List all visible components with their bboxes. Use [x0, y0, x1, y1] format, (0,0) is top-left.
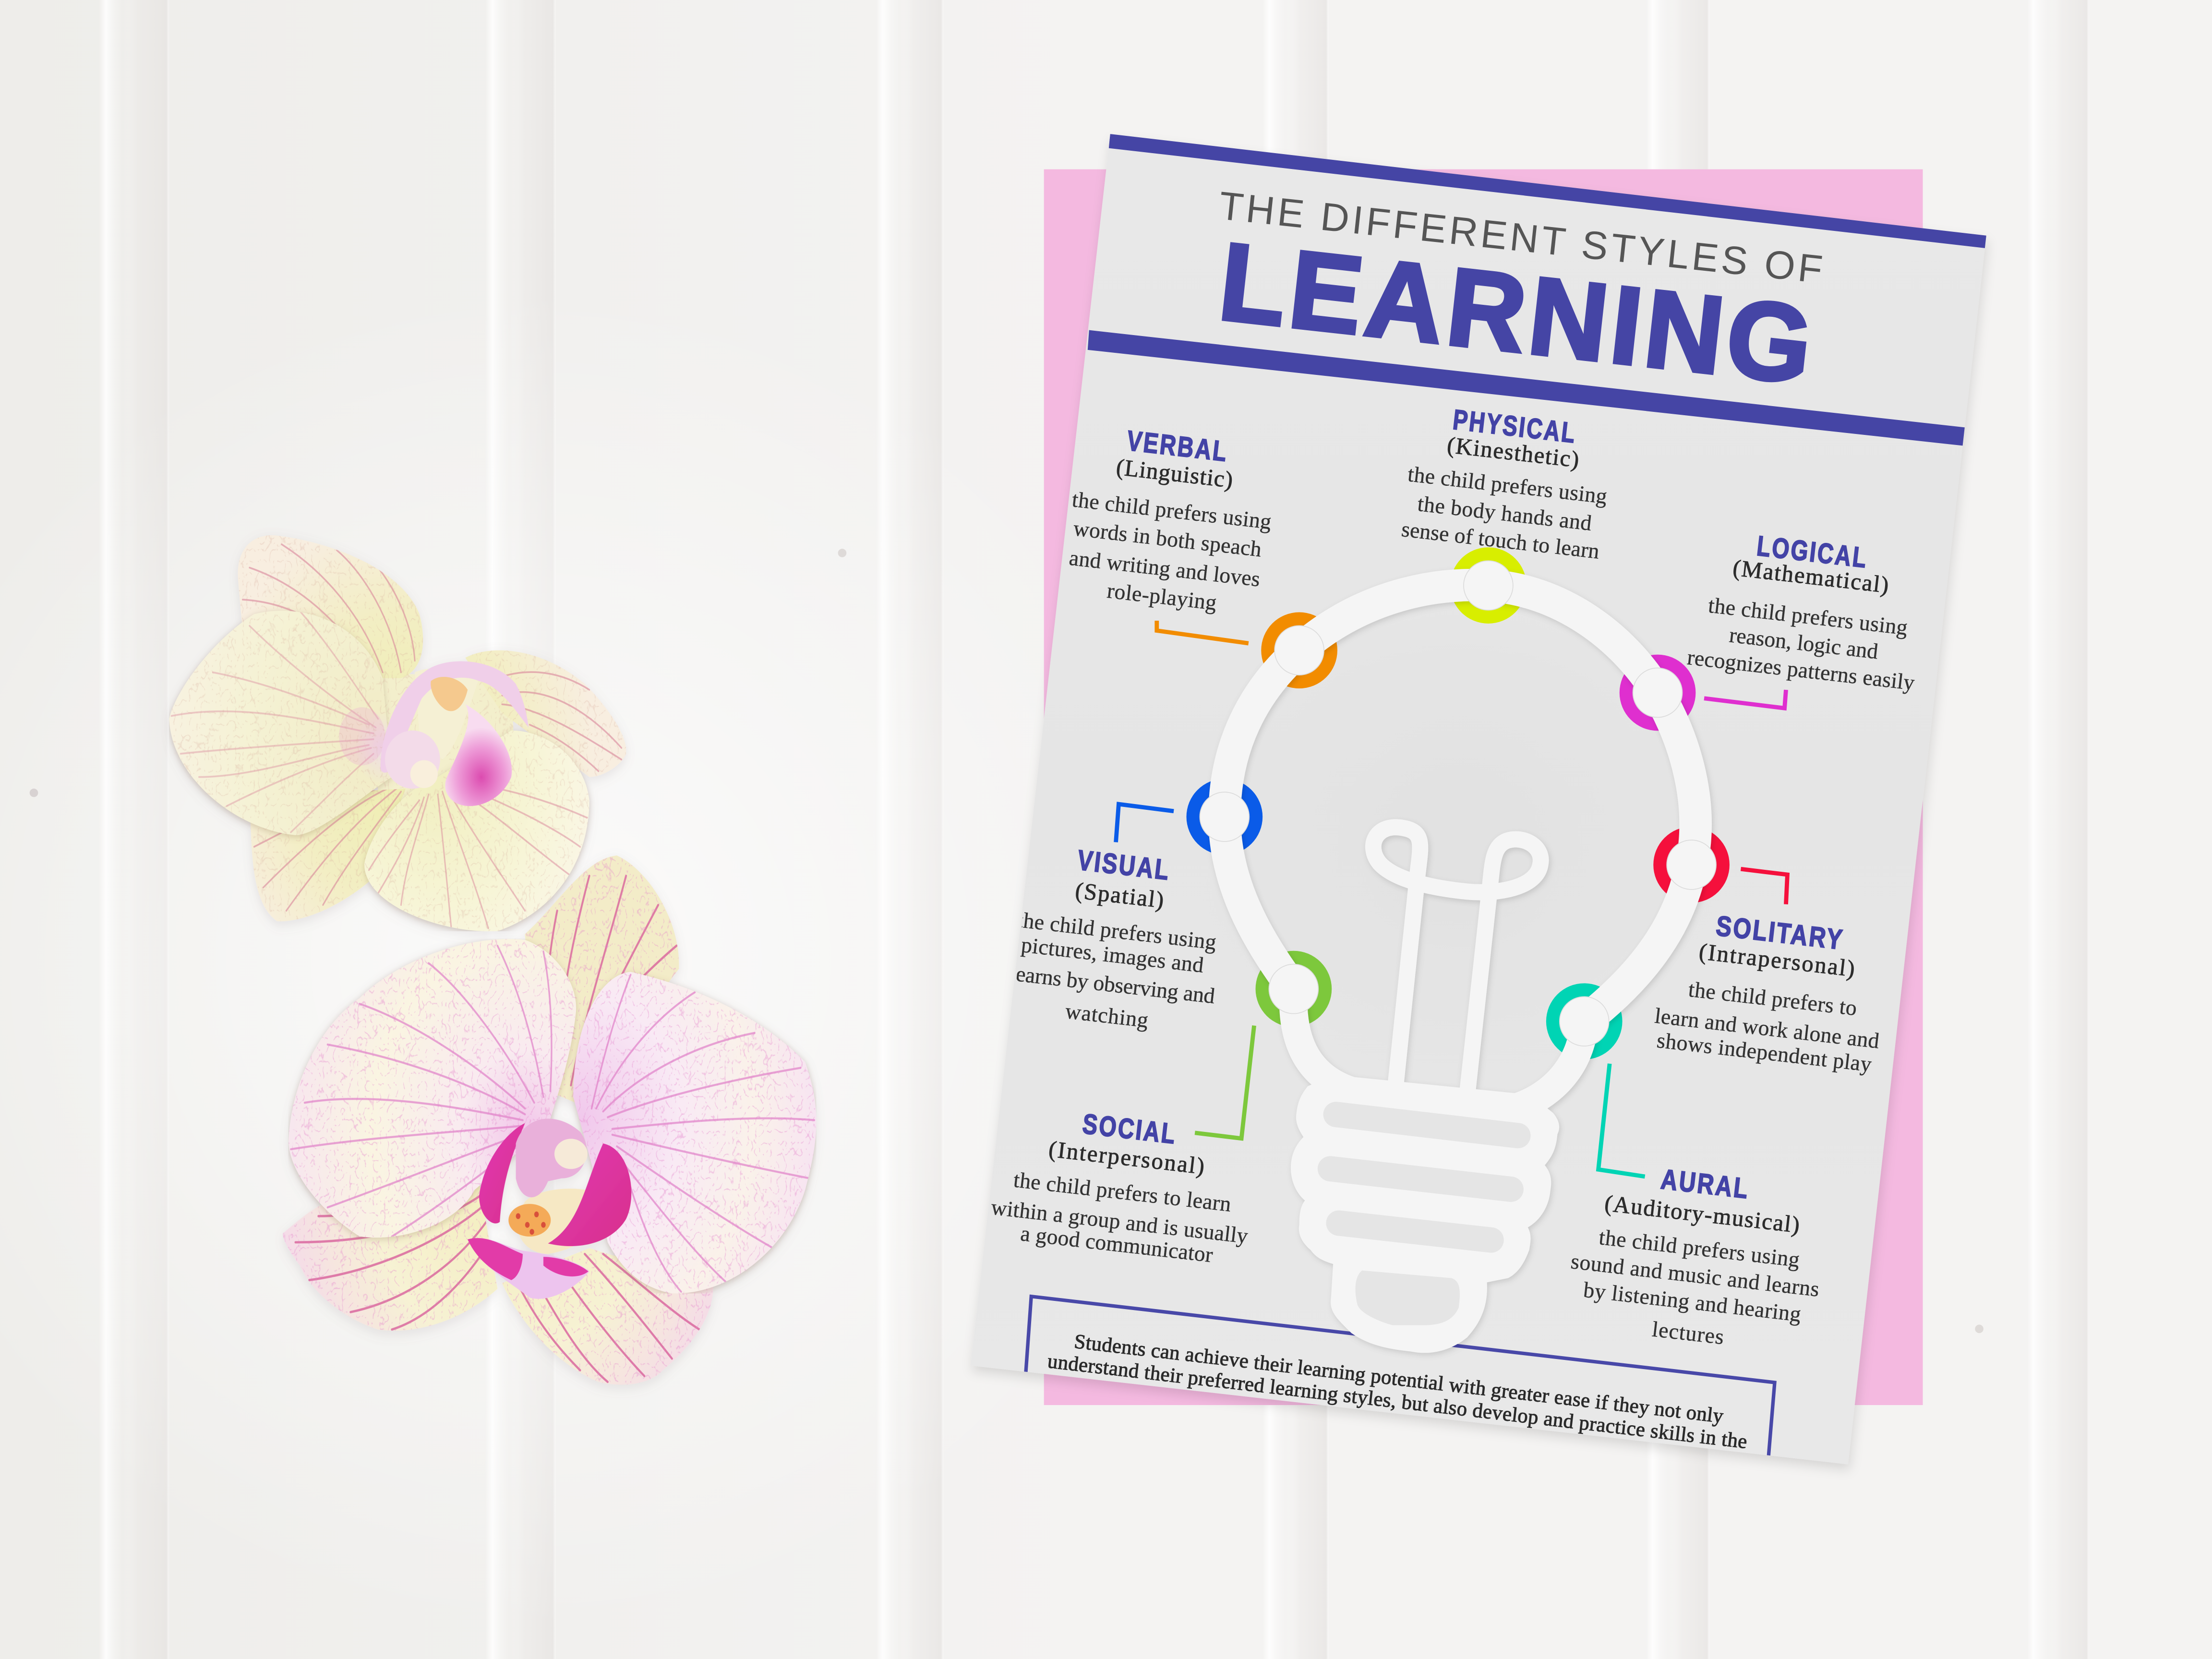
base slot 1	[1336, 1115, 1518, 1136]
bottom callout box outline	[1025, 1297, 1775, 1467]
text block: verbal: and writing and loves	[1068, 545, 1262, 591]
text block: physical: PHYSICAL	[1451, 404, 1578, 449]
text block: aural: sound and music and learns	[1570, 1249, 1821, 1301]
text block: aural: by listening and hearing	[1582, 1277, 1803, 1326]
top header band	[1109, 132, 1988, 248]
text block: solitary: (Intrapersonal)	[1698, 939, 1856, 982]
bottom callout text: Students can achieve their learning potential with greater ease if they not only	[1073, 1330, 1725, 1428]
text block: aural	[1570, 1164, 1821, 1349]
text block: verbal: words in both speach	[1072, 516, 1263, 562]
text block: solitary: the child prefers to	[1687, 977, 1858, 1020]
connector: social	[1195, 1025, 1254, 1139]
text block: physical: sense of touch to learn	[1400, 517, 1601, 564]
text block: visual	[1009, 844, 1218, 1032]
orchid: upper flower	[169, 535, 626, 931]
text block: physical: (Kinesthetic)	[1446, 433, 1580, 473]
bulb screw base	[1291, 1075, 1559, 1353]
connector: visual	[1116, 804, 1174, 842]
text block: visual: the child prefers using	[1016, 907, 1218, 954]
lower orchid large petals	[289, 939, 817, 1294]
text block: logical: LOGICAL	[1755, 530, 1870, 574]
node centres	[1200, 561, 1716, 1046]
bulb filament	[1373, 827, 1541, 1094]
text block: aural: the child prefers using	[1598, 1225, 1801, 1272]
text block: social: (Interpersonal)	[1047, 1136, 1206, 1179]
text block: visual: VISUAL	[1076, 844, 1172, 886]
upper orchid lip and column	[380, 661, 529, 806]
text block: social: SOCIAL	[1081, 1108, 1178, 1150]
connector: solitary	[1741, 869, 1787, 904]
connector: verbal	[1157, 621, 1249, 643]
base slot 3	[1339, 1223, 1491, 1240]
connector: aural	[1599, 1064, 1645, 1177]
base slot 2	[1330, 1169, 1511, 1189]
light bulb illustration	[1225, 585, 1695, 1353]
upper orchid petals	[169, 535, 626, 931]
pink backing card	[1044, 169, 1923, 1405]
text block: social: within a group and is usually	[990, 1194, 1249, 1248]
text block: verbal: (Linguistic)	[1115, 455, 1234, 493]
text block: social: the child prefers to learn	[1012, 1167, 1232, 1216]
text block: verbal: the child prefers using	[1071, 487, 1273, 534]
bulb glass outline	[1225, 585, 1695, 1022]
text block: logical: the child prefers using	[1707, 593, 1909, 639]
text block: aural: (Auditory-musical)	[1603, 1190, 1801, 1238]
poster sheet	[971, 132, 1988, 1467]
bottom callout text: understand their preferred learning styles, but also develop and practice skills in the	[1046, 1350, 1748, 1453]
text block: logical	[1686, 530, 1916, 695]
text block: logical: reason, logic and	[1728, 622, 1879, 663]
title: the different styles of: THE DIFFERENT STYLES OF	[1217, 184, 1827, 292]
text block: visual: learns by observing and	[1009, 961, 1216, 1008]
lower orchid lip and column	[468, 1118, 631, 1299]
text block: aural: lectures	[1651, 1317, 1725, 1349]
title: learning: LEARNING	[1214, 219, 1822, 408]
text block: visual: pictures, images and	[1020, 932, 1205, 977]
base bowl opening	[1356, 1271, 1460, 1325]
text block: physical: the body hands and	[1417, 491, 1593, 535]
text block: verbal: role-playing	[1106, 578, 1218, 615]
text block: solitary: SOLITARY	[1714, 910, 1846, 956]
text block: social	[990, 1108, 1249, 1267]
text block: physical	[1400, 404, 1609, 564]
text block: solitary: shows independent play	[1656, 1028, 1873, 1076]
text block: visual: (Spatial)	[1074, 878, 1165, 913]
text block: verbal: VERBAL	[1125, 425, 1230, 468]
bulb stems	[1293, 989, 1584, 1107]
text block: solitary: learn and work alone and	[1654, 1003, 1881, 1053]
lower orchid sepals	[283, 855, 713, 1385]
text block: social: a good communicator	[1019, 1221, 1214, 1267]
text block: visual: watching	[1064, 998, 1150, 1032]
text block: logical: (Mathematical)	[1731, 555, 1890, 598]
divider band under title	[1088, 330, 1965, 446]
text block: aural: AURAL	[1659, 1164, 1751, 1205]
node rings	[1187, 547, 1730, 1059]
text block: verbal	[1068, 425, 1273, 615]
text block: physical: the child prefers using	[1407, 461, 1609, 508]
text block: solitary	[1654, 910, 1881, 1076]
connector: logical	[1704, 690, 1786, 708]
text block: logical: recognizes patterns easily	[1686, 645, 1916, 695]
orchid: lower flower	[283, 855, 817, 1385]
